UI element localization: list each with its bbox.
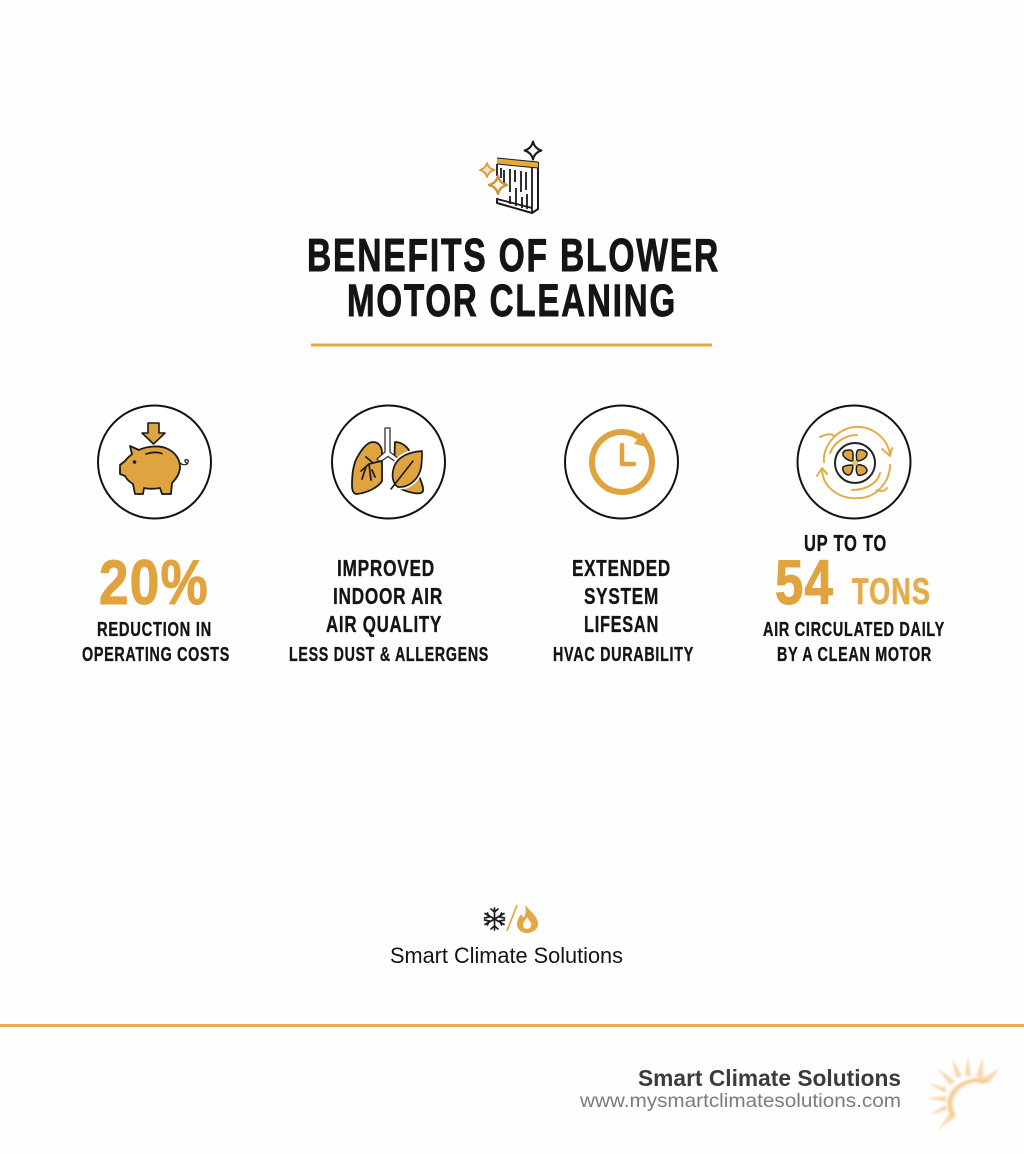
footer text [579,1065,901,1112]
label: air circulated daily: BY A CLEAN MOTOR [777,643,932,666]
label: extended system lifespan: SYSTEM [584,583,659,609]
footer text: www.mysmartclimatesolutions.com [579,1090,901,1112]
stat: 20%: 20% [99,548,209,618]
stat: 54 tons: 54 [775,548,834,618]
panel: system lifespan [553,406,694,666]
label: reduction in operating costs: OPERATING COSTS [82,643,230,666]
icon: snowflake and flame [484,905,538,933]
label: improved indoor air quality: INDOOR AIR [333,583,443,609]
icon: sun logo [926,1055,1000,1130]
label: extended system lifespan: EXTENDED [572,555,671,581]
label: up to to: UP TO TO [804,530,887,556]
label: air circulated daily: AIR CIRCULATED DAILY [763,618,945,641]
title underline [311,344,712,346]
label: reduction in operating costs [82,618,230,666]
label: extended system lifespan: LIFESAN [584,611,659,637]
icon: piggy bank with arrow [98,406,211,518]
label: reduction in operating costs: REDUCTION IN [97,618,212,641]
label: improved indoor air quality [289,555,489,666]
title: MOTOR CLEANING [347,275,677,326]
panel: indoor air quality [289,406,489,666]
label: extended system lifespan [553,555,694,666]
label: air circulated daily [763,618,945,666]
stat: 54 tons: TONS [852,570,931,612]
title [307,229,720,326]
icon: clock with circular arrow [565,406,678,518]
stat: 54 tons [775,548,931,618]
title: BENEFITS OF BLOWER [307,229,720,281]
panel: air circulated [763,406,945,666]
label: improved indoor air quality: LESS DUST & ALLERGENS [289,644,489,666]
label: improved indoor air quality: AIR QUALITY [326,611,442,637]
footer divider [0,1024,1024,1027]
panel: operating costs [82,406,230,666]
footer text: Smart Climate Solutions [638,1065,901,1091]
icon: lungs with leaf [332,406,445,518]
label: extended system lifespan: HVAC DURABILITY [553,644,694,666]
brand name: Smart Climate Solutions [390,943,623,968]
icon: clean air filter with sparkles [480,142,542,213]
label: improved indoor air quality: IMPROVED [337,555,435,581]
icon: fan with airflow arrows [798,406,910,518]
